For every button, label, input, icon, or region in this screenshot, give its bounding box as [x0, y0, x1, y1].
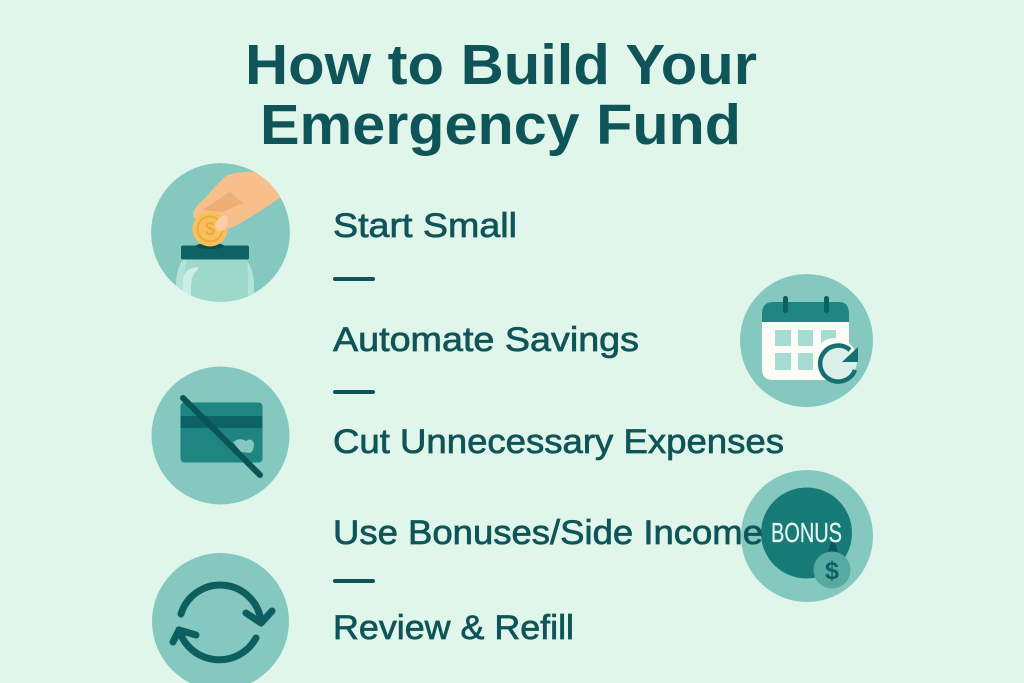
title: Emergency Fund [260, 93, 741, 157]
coin dollar sign: $ [205, 219, 215, 239]
divider: Automate Savings [333, 390, 375, 394]
icon: recurring calendar [740, 274, 873, 407]
step: Review & Refill: Review & Refill [333, 609, 574, 647]
icon: bonus coin: $ [825, 557, 839, 585]
icon: bonus coin: BONUS [771, 517, 842, 548]
title [245, 33, 757, 157]
title: How to Build Your [245, 33, 757, 97]
icon: circular refresh arrows [152, 553, 289, 683]
divider: Use Bonuses/Side Income [333, 579, 375, 583]
icon: crossed-out credit card [152, 366, 290, 504]
step: Start Small: Start Small [333, 207, 517, 245]
step: Use Bonuses/Side Income: Use Bonuses/Side Income [333, 514, 763, 552]
icon: bonus coin [741, 470, 873, 602]
step: Cut Unnecessary Expenses: Cut Unnecessary Expenses [333, 423, 784, 461]
step: Automate Savings: Automate Savings [333, 321, 639, 359]
divider: Start Small [333, 277, 375, 281]
icon: hand dropping coin into jar [151, 163, 290, 305]
